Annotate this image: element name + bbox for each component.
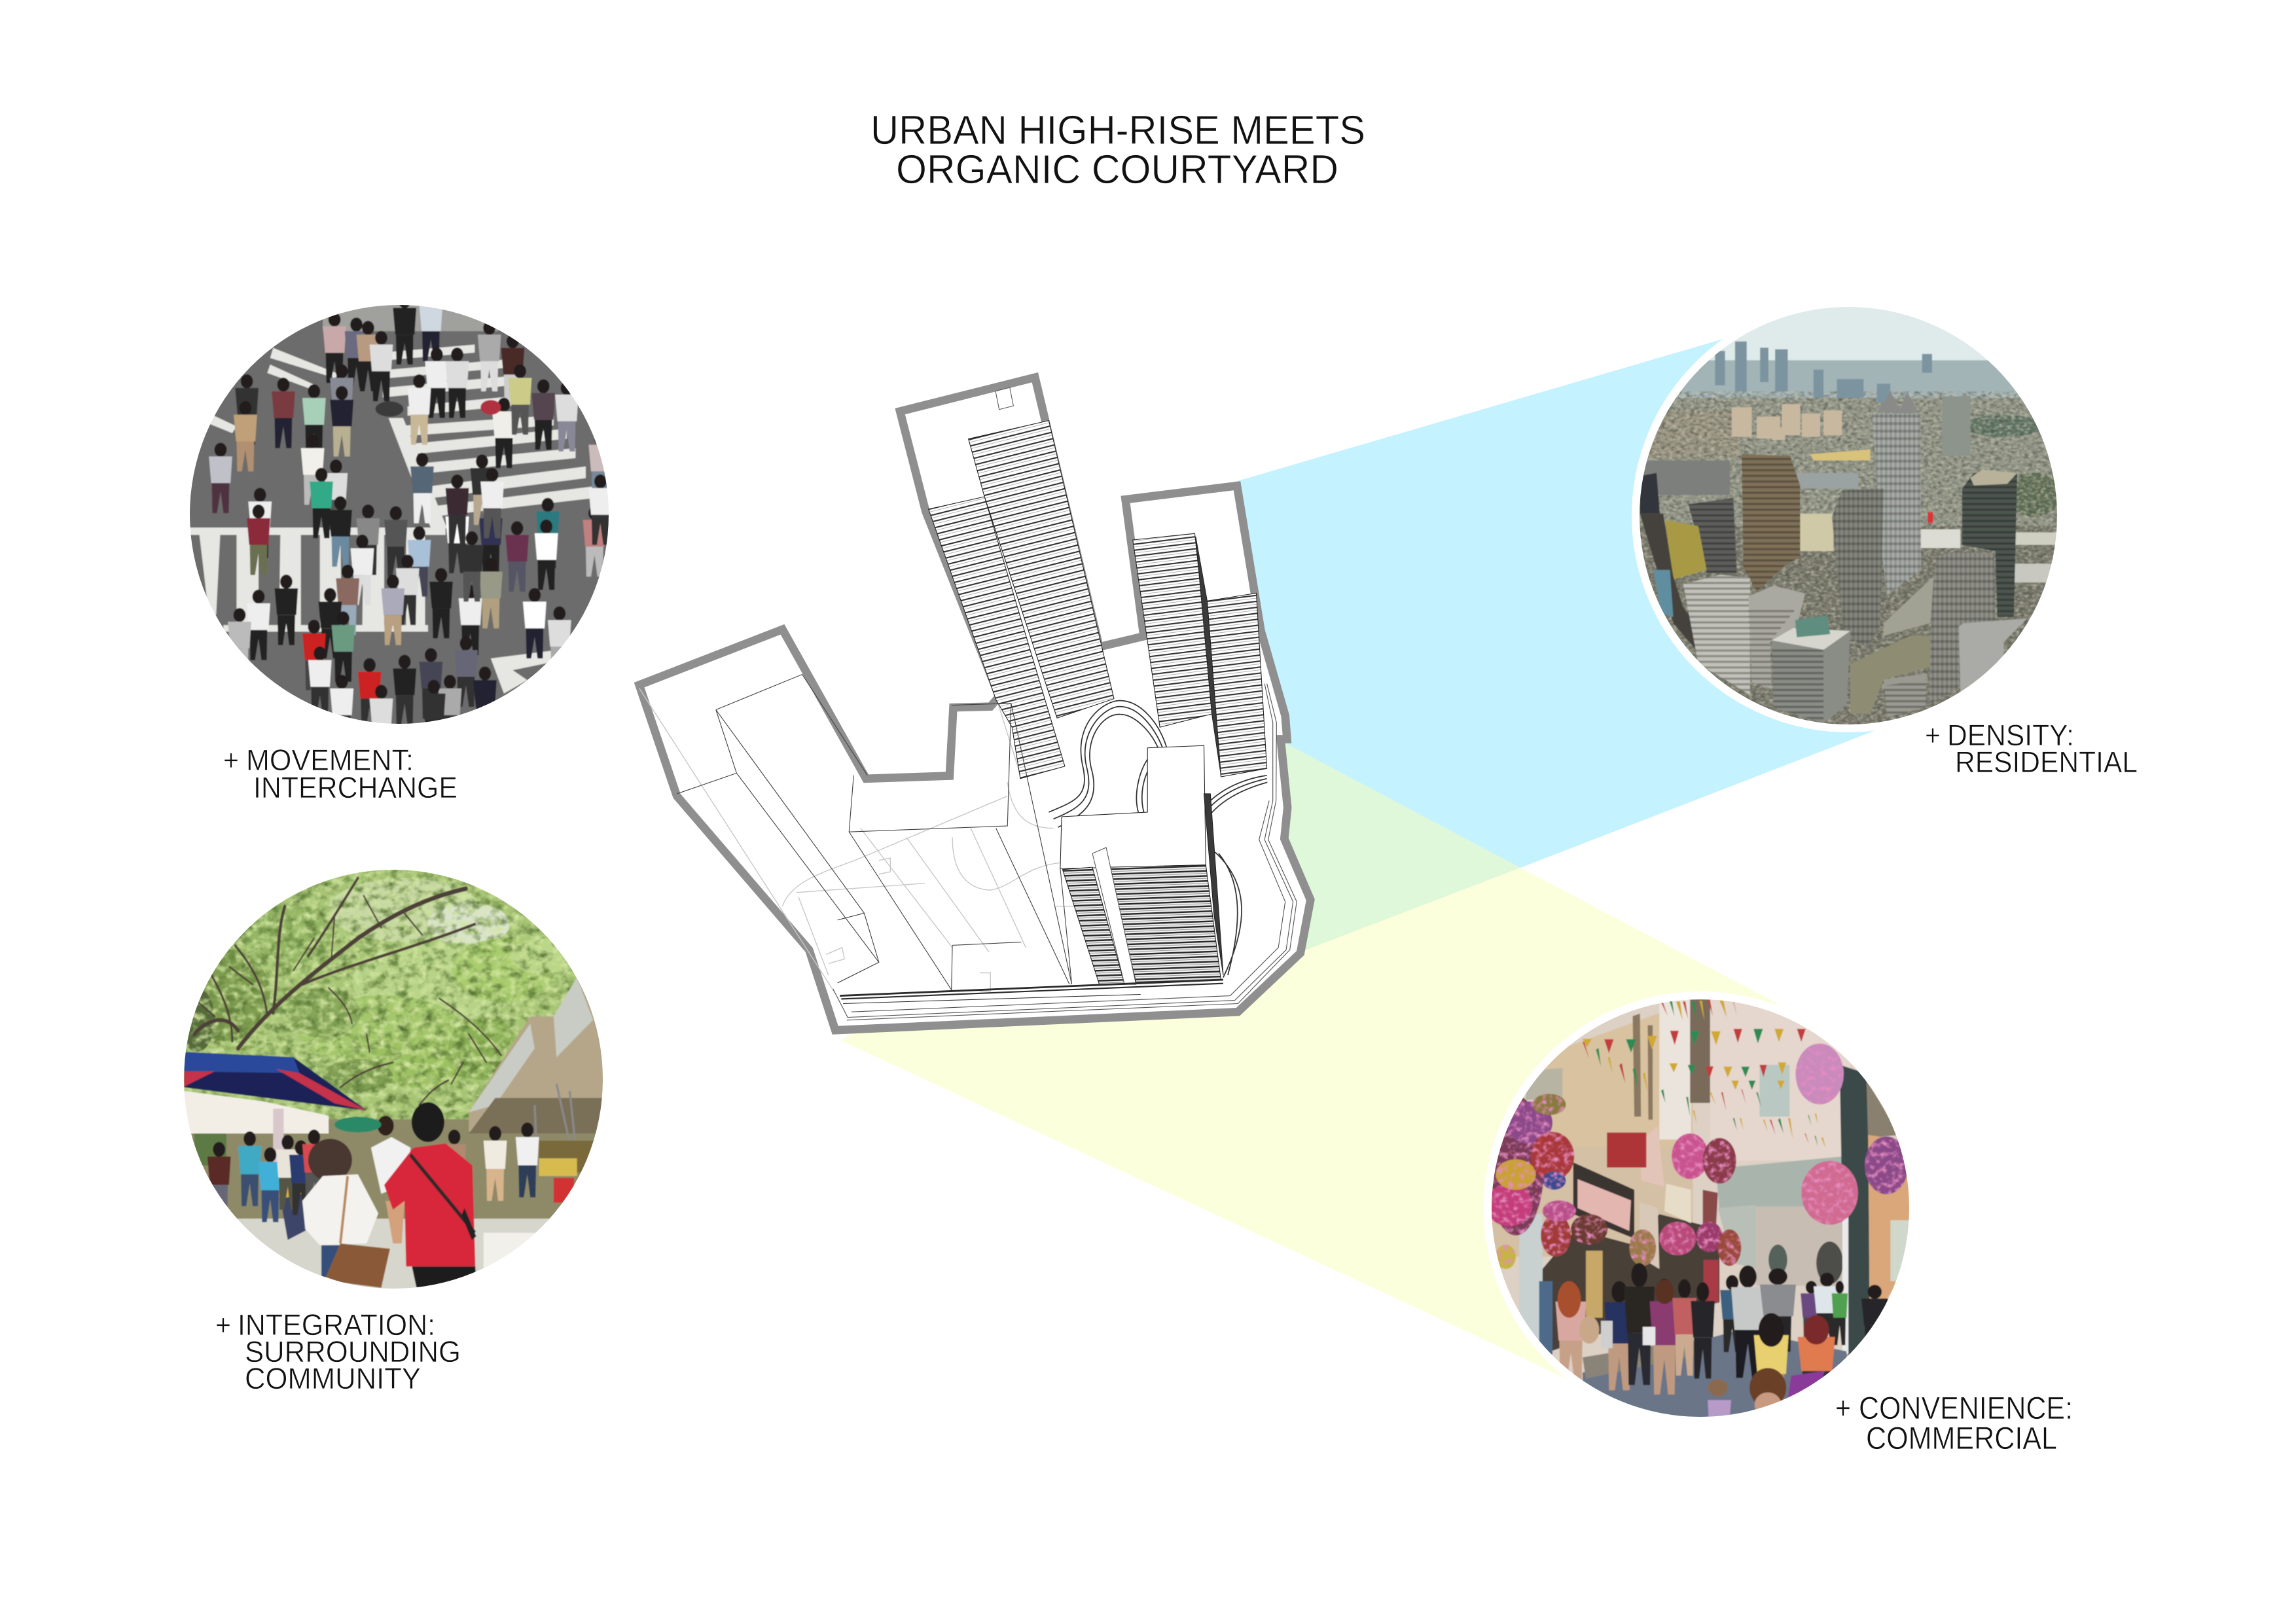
bunting: green — [1596, 1001, 1818, 1147]
woman in white hoodie — [308, 1139, 352, 1181]
caption: integration — [215, 1308, 461, 1395]
pedestrians — [209, 291, 612, 755]
red shop sign — [1607, 1132, 1646, 1168]
bunting: red — [1583, 1000, 1809, 1144]
tree canopy — [179, 878, 574, 1094]
projection wedge: overlap (green) — [1280, 740, 1520, 959]
man in red shirt — [412, 1102, 444, 1142]
caption: movement: + — [223, 743, 239, 777]
white shirt shopper — [371, 1137, 410, 1194]
branches — [194, 878, 501, 1105]
projection wedge: convenience (yellow) — [841, 740, 1777, 1387]
awning — [469, 977, 606, 1132]
photo: crowd at pedestrian crossing — [190, 305, 609, 724]
photo: shopping street with bunting — [1486, 995, 2009, 1427]
caption: integration: COMMUNITY — [245, 1362, 421, 1395]
curved courtyard ramp — [1049, 701, 1267, 978]
tower 3 — [1060, 745, 1223, 984]
podium ramp band — [840, 980, 1223, 1004]
caption: density — [1925, 719, 2138, 779]
hanging flower baskets — [1486, 1043, 1908, 1269]
shopfronts — [1543, 1214, 1719, 1354]
site outline wall — [639, 378, 1310, 1030]
inner perimeter lines — [833, 684, 1297, 1020]
title: ORGANIC COURTYARD — [896, 147, 1338, 192]
ground — [1583, 1330, 1853, 1421]
shoppers — [207, 1122, 539, 1222]
central building axonometric — [639, 378, 1310, 1030]
caption: density: RESIDENTIAL — [1955, 745, 2138, 779]
umbrella — [184, 1052, 367, 1111]
caption: integration: INTEGRATION: — [238, 1308, 435, 1342]
shoppers — [1556, 1263, 1888, 1418]
caption: movement: MOVEMENT: — [246, 743, 414, 777]
market ground and stalls — [191, 1119, 596, 1219]
caption: density: DENSITY: — [1947, 719, 2074, 752]
ghost lines — [639, 688, 1074, 993]
photo: market under trees — [184, 870, 603, 1289]
caption: movement — [223, 743, 457, 804]
caption: integration: + — [215, 1308, 231, 1342]
crosswalk stripes — [185, 345, 593, 694]
caption: convenience: CONVENIENCE: — [1859, 1391, 2073, 1426]
caption: convenience: COMMERCIAL — [1866, 1421, 2057, 1456]
caption: convenience: + — [1835, 1391, 1851, 1426]
photo: white ring behind street view — [1484, 991, 1917, 1425]
projection wedge: density (blue) — [1217, 338, 1874, 959]
caption: density: + — [1925, 719, 1941, 752]
caption: movement: INTERCHANGE — [253, 771, 457, 804]
distant towers — [1715, 342, 1932, 402]
caption: convenience — [1835, 1391, 2073, 1456]
photo: white ring behind city view — [1632, 299, 2065, 732]
title — [870, 108, 1365, 192]
bunting: yellow — [1583, 1000, 1825, 1149]
tower 1 floors — [929, 387, 1114, 779]
produce and goods — [539, 1141, 598, 1173]
high-rise blocks — [1640, 391, 2027, 723]
tower 2 floors — [1133, 533, 1267, 777]
caption: integration: SURROUNDING — [245, 1335, 461, 1368]
title: URBAN HIGH-RISE MEETS — [870, 108, 1365, 153]
photo: high-rise skyline — [1640, 307, 2057, 724]
podium and low blocks — [677, 675, 1071, 991]
